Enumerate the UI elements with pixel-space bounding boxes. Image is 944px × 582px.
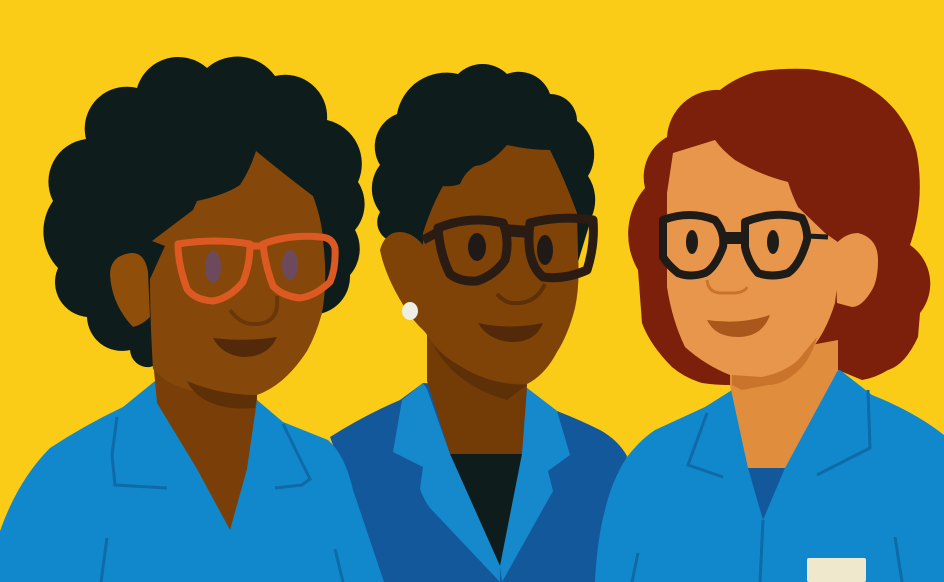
ear: right woman	[835, 233, 878, 307]
eyes: right woman	[686, 230, 779, 254]
nose: left woman	[230, 296, 277, 324]
eyes: middle woman	[468, 233, 553, 265]
nose: middle woman	[497, 284, 545, 303]
neck: left woman	[153, 360, 257, 530]
neck shadow: right woman	[732, 337, 817, 390]
hair: left woman	[43, 57, 365, 367]
face: left woman	[150, 151, 325, 396]
earring	[402, 302, 418, 320]
mouth: right woman	[707, 315, 770, 337]
mouth: left woman	[213, 337, 277, 357]
hair: middle woman	[372, 64, 595, 262]
hair: right woman	[628, 69, 930, 385]
eyes: left woman	[205, 250, 298, 283]
figure: left woman	[0, 57, 384, 582]
coat: right woman	[595, 370, 944, 582]
left lapel: middle woman	[393, 383, 500, 582]
shirt: middle woman	[450, 454, 522, 566]
coat: left woman	[0, 381, 384, 582]
name badge	[807, 558, 866, 582]
glasses: middle woman	[423, 218, 593, 281]
figure: middle woman	[330, 64, 627, 582]
neck shadow: left woman	[187, 381, 257, 409]
glasses: left woman	[178, 236, 335, 301]
collar lines: right woman	[632, 390, 902, 582]
neck: middle woman	[427, 330, 527, 454]
ear: left woman	[110, 253, 150, 327]
face: right woman	[667, 140, 842, 377]
neck: right woman	[730, 340, 838, 468]
chin shadow: middle woman	[433, 345, 527, 400]
coat: middle woman	[330, 383, 627, 582]
mouth: middle woman	[478, 323, 543, 342]
figure: right woman	[595, 69, 944, 582]
collar lines: left woman	[101, 417, 343, 582]
undershirt: right woman	[748, 468, 785, 520]
face: middle woman	[380, 145, 579, 384]
glasses: right woman	[663, 215, 828, 276]
nose: right woman	[707, 280, 747, 293]
right lapel: middle woman	[500, 388, 570, 582]
